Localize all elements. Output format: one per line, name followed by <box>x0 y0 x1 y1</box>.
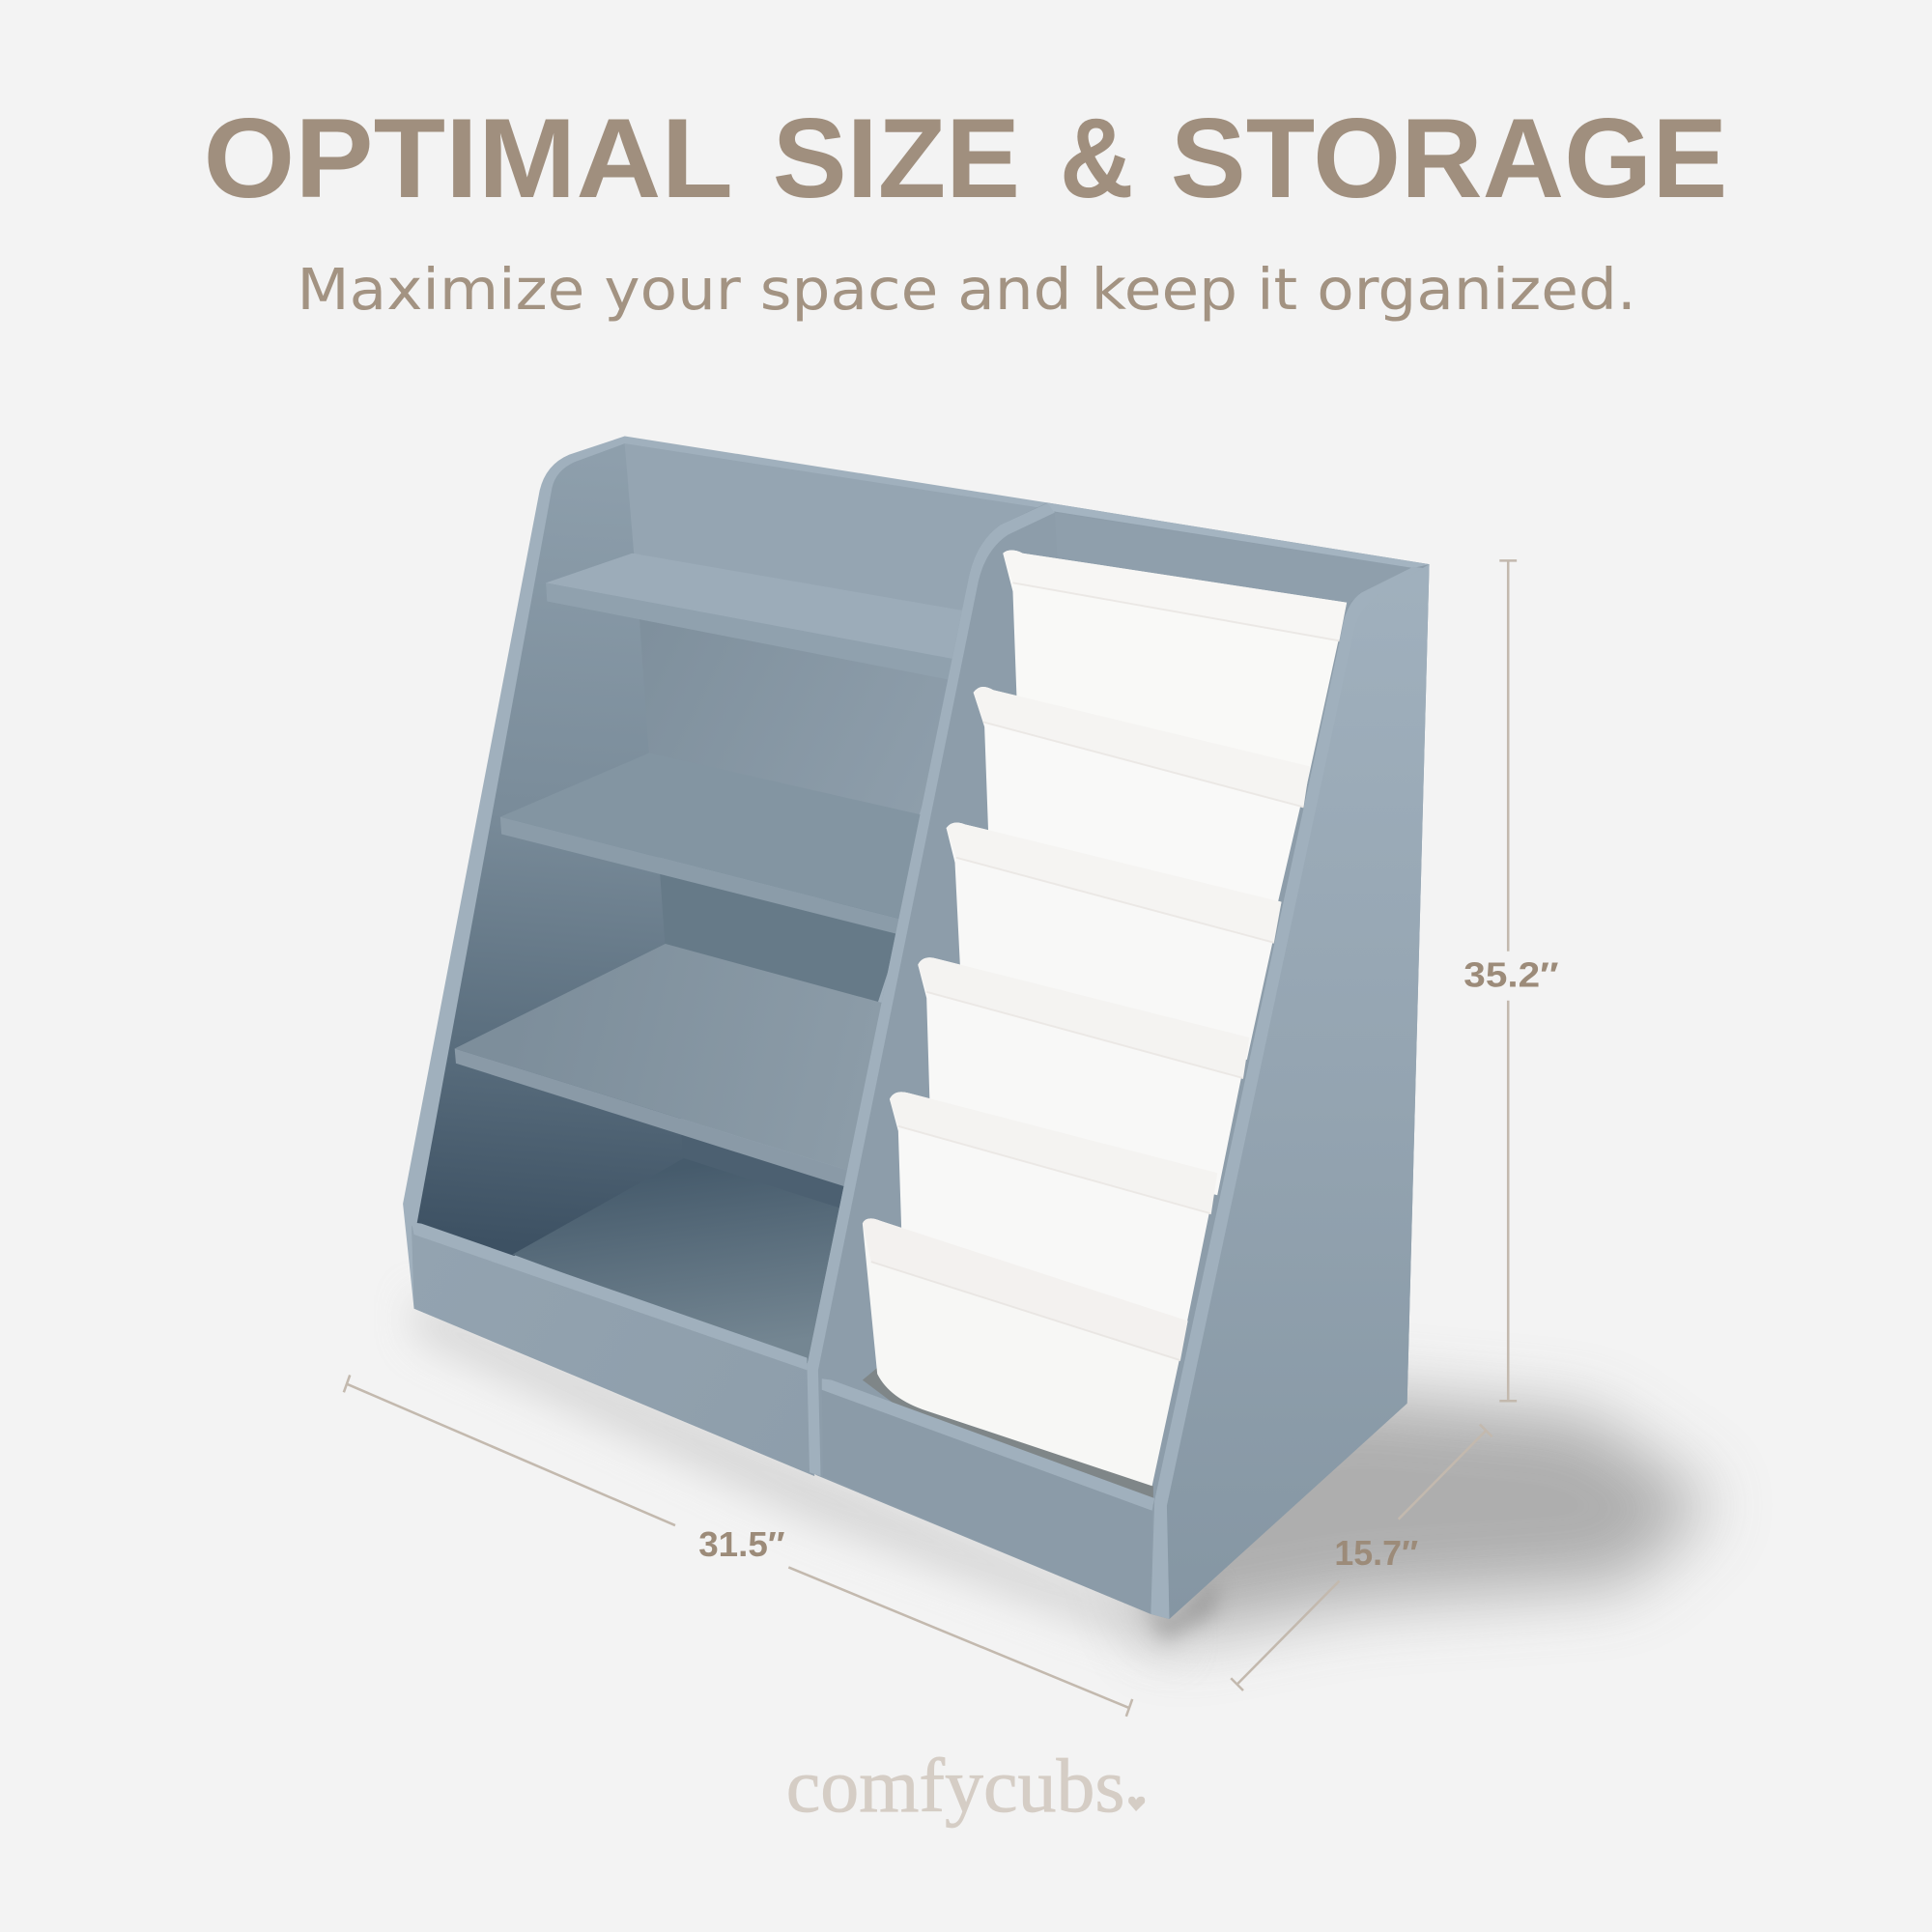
sling 6 <box>863 1218 1188 1486</box>
title: STORAGE <box>1171 95 1727 221</box>
gap behind sling 6 <box>863 1368 1153 1506</box>
icon: heart <box>1128 1797 1145 1811</box>
label: width: 31.5″ <box>698 1525 784 1564</box>
label: height: 35.2″ <box>1463 956 1559 995</box>
sling 3 <box>947 822 1282 1060</box>
shelf 3 <box>455 944 887 1189</box>
shelf 2 <box>500 753 930 935</box>
divider front edge <box>807 502 1055 1476</box>
lower bin floor <box>513 1158 850 1368</box>
right unit top lip <box>1047 502 1430 568</box>
title <box>203 95 1727 221</box>
title: SIZE <box>773 95 1020 221</box>
sling 1 <box>1003 551 1347 788</box>
right unit body <box>807 502 1430 1619</box>
right base board <box>822 1378 1154 1614</box>
left unit back panel under shelf 1 <box>639 604 967 819</box>
bookshelf <box>403 437 1430 1619</box>
dimension: depth <box>1231 1424 1492 1690</box>
right panel front edge <box>1151 567 1423 1619</box>
subtitle: Maximize your space and keep it organized. <box>297 257 1636 323</box>
dimension: width <box>344 1375 1132 1717</box>
title: OPTIMAL <box>203 95 733 221</box>
canvas slings <box>863 551 1347 1506</box>
shelf 1 <box>546 554 974 680</box>
left unit silhouette <box>403 437 1047 1476</box>
left unit inner wall <box>416 443 685 1257</box>
left unit back panel under shelf 3 <box>681 1133 863 1220</box>
right unit back panel <box>1055 513 1413 616</box>
right side panel <box>1167 564 1430 1619</box>
label: depth: 15.7″ <box>1334 1534 1418 1573</box>
left unit back panel under shelf 2 <box>659 863 906 1005</box>
left base board <box>412 1222 814 1476</box>
brand logo: comfycubs <box>786 1745 1125 1829</box>
title: & <box>1060 95 1133 221</box>
left unit back panel top <box>625 443 1047 612</box>
sling 5 <box>890 1092 1217 1331</box>
floor shadows <box>415 1293 1713 1658</box>
dimension: height <box>1499 560 1517 1401</box>
sling 4 <box>918 957 1249 1195</box>
sling 2 <box>974 687 1310 924</box>
